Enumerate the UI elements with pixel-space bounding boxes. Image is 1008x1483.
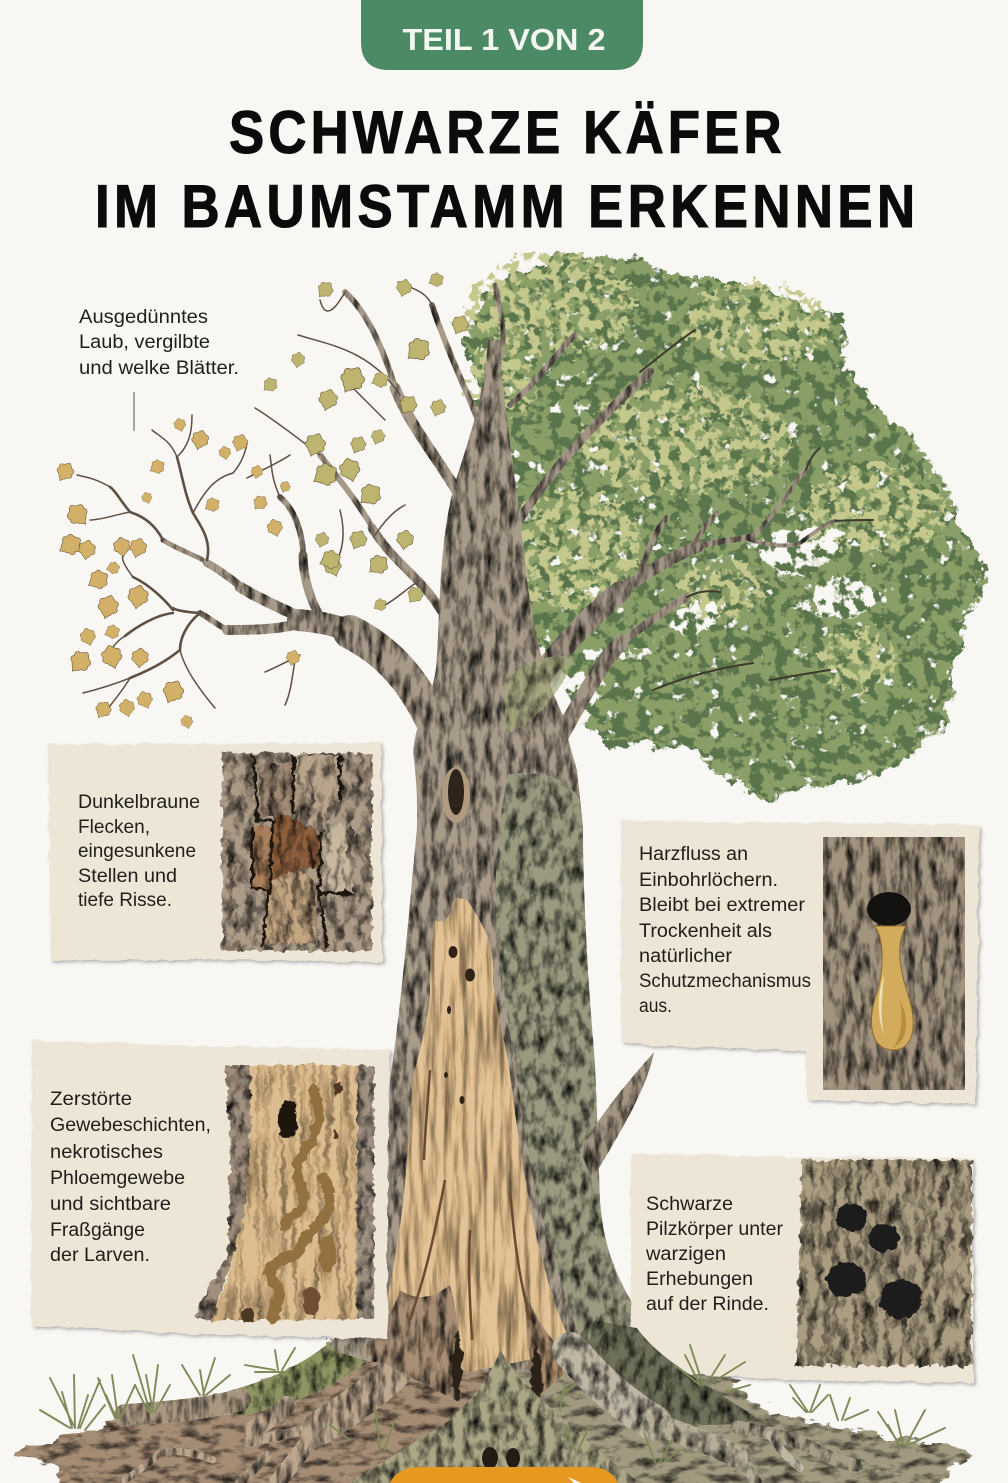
annotation: thinned foliage [79, 306, 239, 431]
mossy bark right side [496, 773, 648, 1365]
text block [78, 791, 200, 911]
broken branch stub [580, 1052, 654, 1180]
dark crack at trunk base [410, 1070, 530, 1340]
grass tufts [40, 1345, 945, 1462]
text block: eingesunkene [78, 840, 196, 862]
text block: natürlicher [639, 945, 732, 967]
trunk bark [330, 340, 660, 1371]
roots and ground [18, 1342, 975, 1483]
text block: Pilzkörper unter [646, 1218, 783, 1240]
withered yellow leaves [53, 271, 472, 730]
panel: resin flow [621, 821, 979, 1104]
canopy branches on the healthy side [495, 285, 835, 745]
text block: Gewebeschichten, [50, 1114, 211, 1136]
text block: auf der Rinde. [646, 1293, 769, 1315]
mossy patch on fork [505, 656, 575, 735]
sky gaps in foliage [562, 528, 877, 726]
soil left [18, 1345, 500, 1483]
exposed pale wood [372, 898, 575, 1372]
soil right [500, 1345, 975, 1483]
text block: tiefe Risse. [78, 889, 172, 911]
thin twigs on the left [77, 282, 432, 715]
moss bank left [170, 1342, 380, 1415]
illustration: borehole with resin drop [823, 837, 965, 1090]
illustration: cracked bark with sunken patch [222, 753, 372, 951]
title: IM BAUMSTAMM ERKENNEN [95, 173, 915, 240]
thin dark twigs in foliage [640, 330, 873, 690]
dark clefts at trunk base [452, 1330, 542, 1402]
text block: und sichtbare [50, 1193, 171, 1215]
text block: Dunkelbraune [78, 791, 200, 813]
tree canopy: healthy green foliage [470, 255, 981, 795]
text block: Stellen und [78, 865, 177, 887]
center moss root mound [350, 1350, 640, 1483]
text block: Einbohrlöchern. [639, 869, 778, 891]
text block: der Larven. [50, 1244, 150, 1266]
text block: Erhebungen [646, 1268, 753, 1290]
text block: Zerstörte [50, 1088, 132, 1110]
light sunlit leaf clumps [470, 255, 950, 690]
brown root flare left of cleft [362, 1285, 459, 1400]
text block [645, 1193, 783, 1315]
tree trunk [330, 340, 660, 1402]
illustration: fungal bodies on bark [796, 1160, 972, 1366]
panel: destroyed tissue [31, 1041, 389, 1339]
panel: black fungal bodies [631, 1154, 973, 1383]
illustration: larval galleries in wood [193, 1065, 374, 1322]
text block: Schutzmechanismus [639, 970, 811, 992]
header tab: part indicator [361, 0, 643, 70]
text block: Trockenheit als [639, 920, 772, 942]
bare dying branches on the left [163, 292, 480, 720]
title [95, 99, 915, 240]
bottom orange button [390, 1467, 618, 1483]
header tab: part indicator: TEIL 1 VON 2 [402, 22, 606, 57]
panel: dark patches [48, 743, 382, 962]
text block: Flecken, [78, 816, 150, 838]
annotation: thinned foliage: und welke Blätter. [79, 357, 239, 379]
brown flare right of cleft [525, 1290, 575, 1400]
annotation: thinned foliage: Laub, vergilbte [79, 331, 210, 353]
annotation: thinned foliage: Ausgedünntes [79, 306, 208, 328]
title: SCHWARZE KÄFER [229, 99, 782, 166]
text block: Bleibt bei extremer [639, 894, 805, 916]
boreholes on wood [444, 946, 475, 1104]
dark mossy root buttress over panel corner [570, 1320, 857, 1483]
text block [50, 1088, 211, 1266]
text block: aus. [639, 995, 672, 1017]
gray roots [570, 1350, 857, 1483]
text block: nekrotisches [50, 1141, 163, 1163]
roots [125, 1360, 405, 1483]
cavity near fork [442, 767, 470, 823]
text block [639, 843, 811, 1017]
text block: Fraßgänge [50, 1219, 145, 1241]
text block: Harzfluss an [639, 843, 748, 865]
text block: Schwarze [646, 1193, 733, 1215]
icon: arrow tip [568, 1477, 581, 1483]
text block: Phloemgewebe [50, 1167, 185, 1189]
text block: warzigen [645, 1243, 726, 1265]
